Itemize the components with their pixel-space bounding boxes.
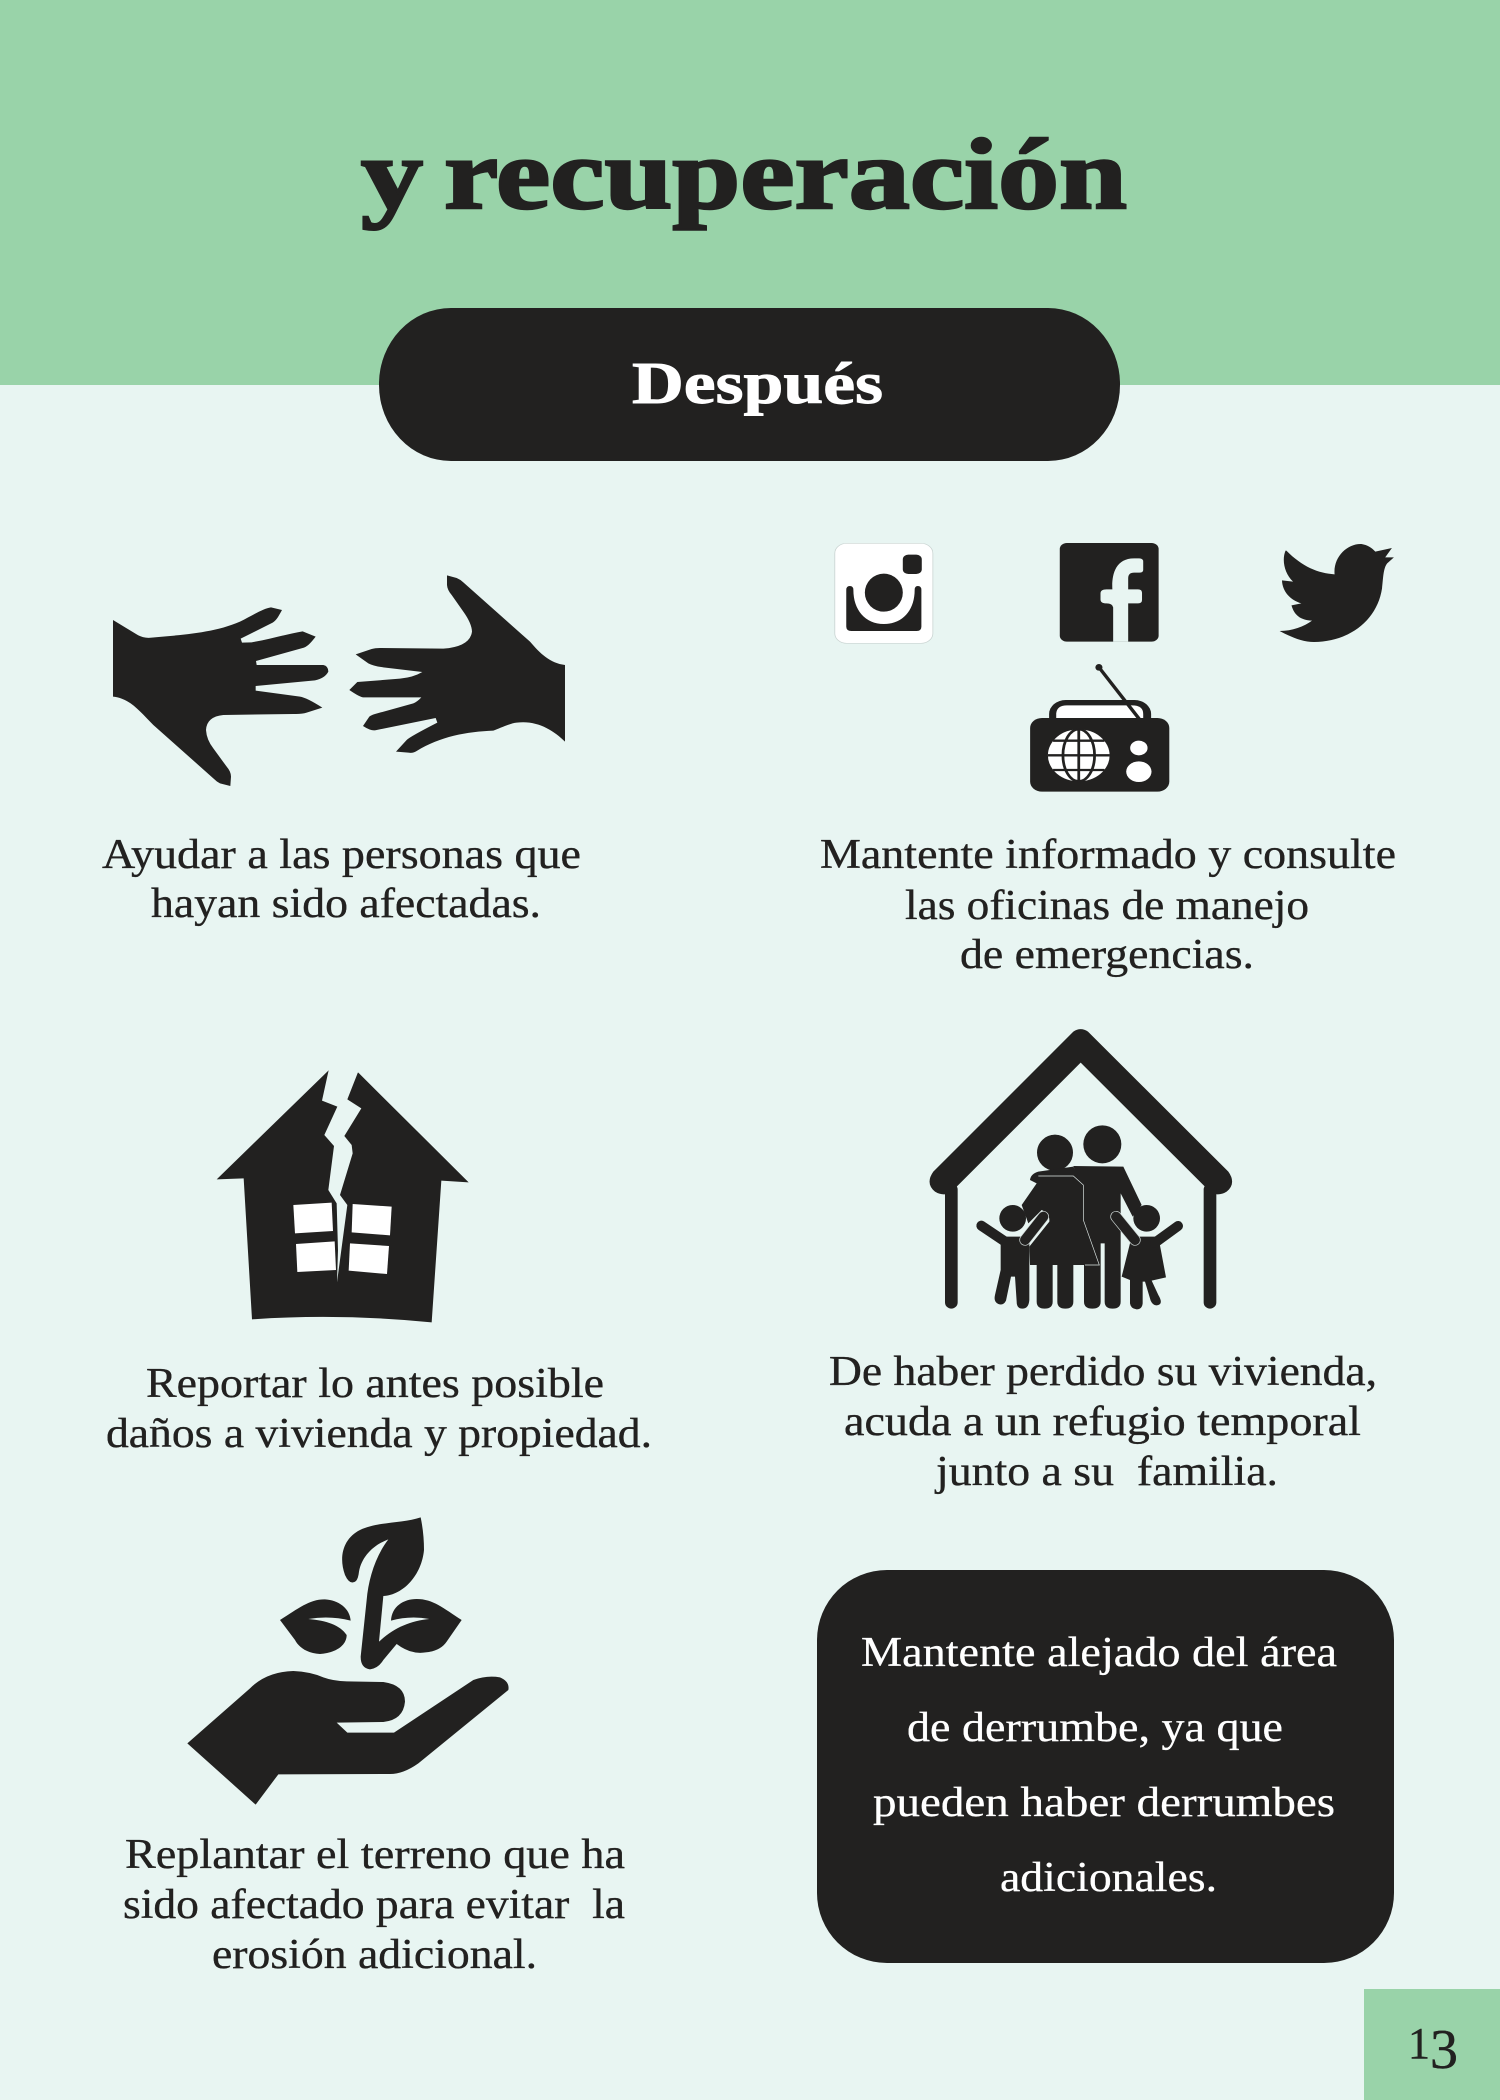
icon: two reaching hands (113, 575, 565, 786)
section pill: Después (379, 308, 1120, 461)
panel: temporary shelter (829, 1029, 1377, 1495)
callout: stay away from landslide (817, 1570, 1394, 1963)
text: report damage (106, 1361, 652, 1457)
text: replant land: erosión adicional. (212, 1932, 537, 1978)
text: replant land: sido afectado para evitar la (123, 1882, 625, 1928)
panel: stay informed (820, 543, 1396, 978)
text: help people (102, 832, 581, 927)
text: temporary shelter (829, 1349, 1377, 1495)
icon: twitter bird (1280, 544, 1394, 642)
title: y (361, 118, 423, 230)
callout: stay away from landslide: Mantente alejado del área (861, 1630, 1337, 1676)
text: stay informed: las oficinas de manejo (905, 883, 1309, 929)
icon: radio (1030, 664, 1169, 792)
icon: facebook (1060, 543, 1159, 642)
page number (1364, 1989, 1500, 2100)
panel: replant land (123, 1517, 625, 1978)
text: help people: Ayudar a las personas que (102, 832, 581, 878)
panel: help people (102, 575, 581, 927)
text: replant land: Replantar el terreno que ha (125, 1832, 625, 1878)
header band (0, 0, 1500, 385)
title: recuperación (444, 118, 1127, 230)
icon: instagram (835, 543, 933, 643)
text: help people: hayan sido afectadas. (151, 881, 541, 927)
text: stay informed: de emergencias. (960, 932, 1254, 978)
text: replant land (123, 1832, 625, 1978)
text: report damage: Reportar lo antes posible (146, 1361, 604, 1407)
panel: report damage (106, 1069, 652, 1457)
callout: stay away from landslide: pueden haber derrumbes (873, 1780, 1335, 1826)
section pill: Después: Después (632, 350, 883, 416)
icon: cracked house (217, 1069, 469, 1322)
icon: hand holding sprout (187, 1517, 509, 1805)
text: temporary shelter: De haber perdido su vivienda, (829, 1349, 1377, 1395)
callout: stay away from landslide: adicionales. (1000, 1855, 1217, 1901)
text: stay informed (820, 832, 1396, 978)
page number: 1 (1408, 2019, 1430, 2068)
text: stay informed: Mantente informado y consulte (820, 832, 1396, 878)
text: temporary shelter: junto a su familia. (934, 1449, 1278, 1495)
text: report damage: daños a vivienda y propiedad. (106, 1411, 652, 1457)
icon: family under roof (930, 1029, 1232, 1309)
text: temporary shelter: acuda a un refugio temporal (844, 1399, 1361, 1445)
page number: 3 (1430, 2019, 1458, 2081)
callout: stay away from landslide: de derrumbe, ya que (907, 1705, 1283, 1751)
